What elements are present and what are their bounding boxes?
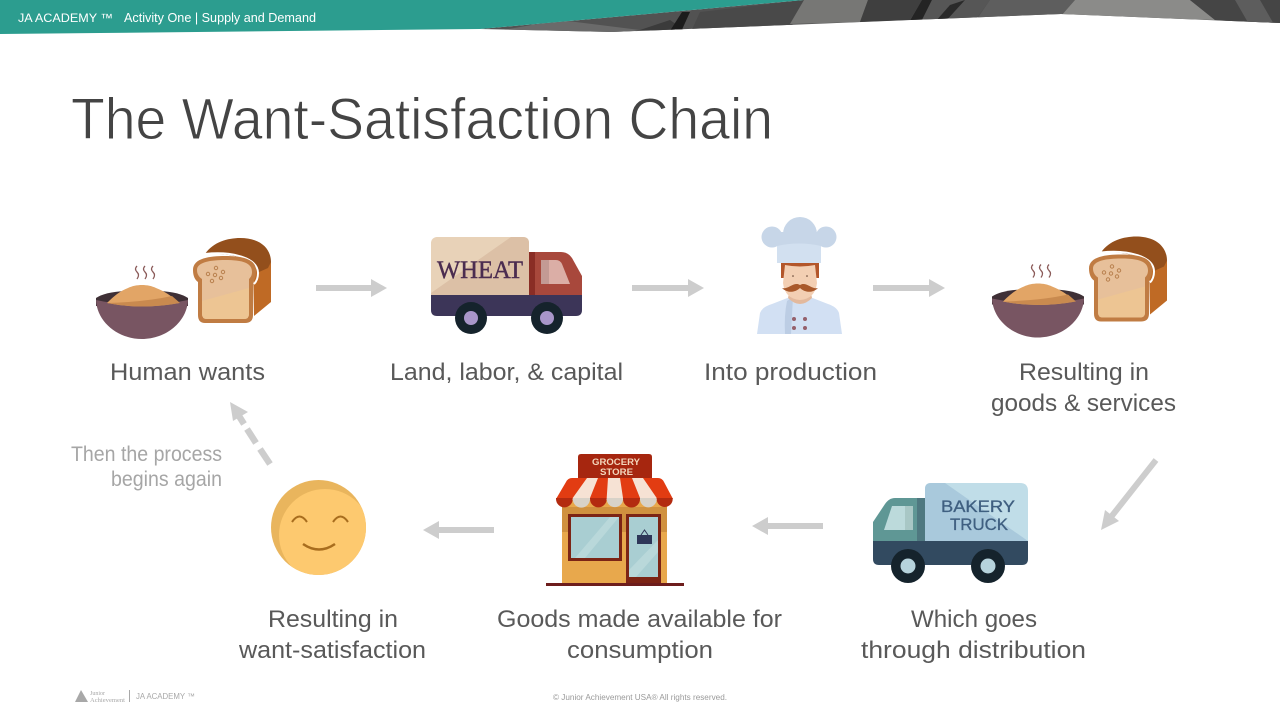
label: resulting in goods and services: Resulting in [1019,359,1149,386]
truck text: WHEAT [437,257,523,284]
footer copyright: © Junior Achievement USA® All rights reserved. [553,693,727,702]
arrow: goods to distribution [1101,460,1156,530]
label: land labor capital: Land, labor, & capital [390,359,623,386]
footer logo: Achievement [90,698,125,704]
label: goods available: Goods made available for [497,606,782,633]
label: want-satisfaction: Resulting in [268,606,398,633]
label: resulting in goods and services: goods & services [991,390,1176,417]
truck text: BAKERY [941,497,1015,516]
icon: smiley [271,480,366,575]
footer logo: JA ACADEMY ™ [136,692,195,701]
store sign text [592,457,640,477]
label: human wants: Human wants [110,359,265,386]
header text [18,11,316,25]
label: want-satisfaction: want-satisfaction [238,637,426,664]
icon: bowl and bread (human wants) [96,238,271,339]
label: distribution: Which goes [911,606,1037,633]
header banner [0,0,1280,34]
truck text: TRUCK [950,515,1009,534]
footer logo [75,690,195,704]
header text: Activity One | Supply and Demand [124,11,316,25]
icon: bakery truck [873,483,1028,583]
label: into production: Into production [704,359,877,386]
arrow: distribution to store [752,517,823,535]
store sign text: STORE [600,467,633,477]
icon: wheat truck [431,237,582,334]
label: distribution: through distribution [861,637,1086,664]
label: want-satisfaction [238,606,426,664]
icon: chef [757,217,842,334]
arrow: production to goods [873,279,945,297]
note: process begins again: Then the process [71,443,222,466]
store sign text: GROCERY [592,457,640,467]
label: goods available: consumption [567,637,713,664]
icon: grocery store [546,454,684,586]
arrow: dashed, process restarts [230,402,270,464]
label: goods available [497,606,782,664]
truck text [941,497,1015,534]
label: resulting in goods and services [991,359,1176,417]
icon: bowl and bread (goods and services) [992,236,1167,338]
arrow: store to satisfaction [423,521,494,539]
note: process begins again [71,443,222,491]
title: The Want-Satisfaction Chain [71,87,773,152]
arrow: resources to production [632,279,704,297]
note: process begins again: begins again [111,468,222,491]
label: distribution [861,606,1086,664]
header text: JA ACADEMY ™ [18,11,113,25]
footer logo: Junior [90,691,105,697]
arrow: wants to resources [316,279,387,297]
